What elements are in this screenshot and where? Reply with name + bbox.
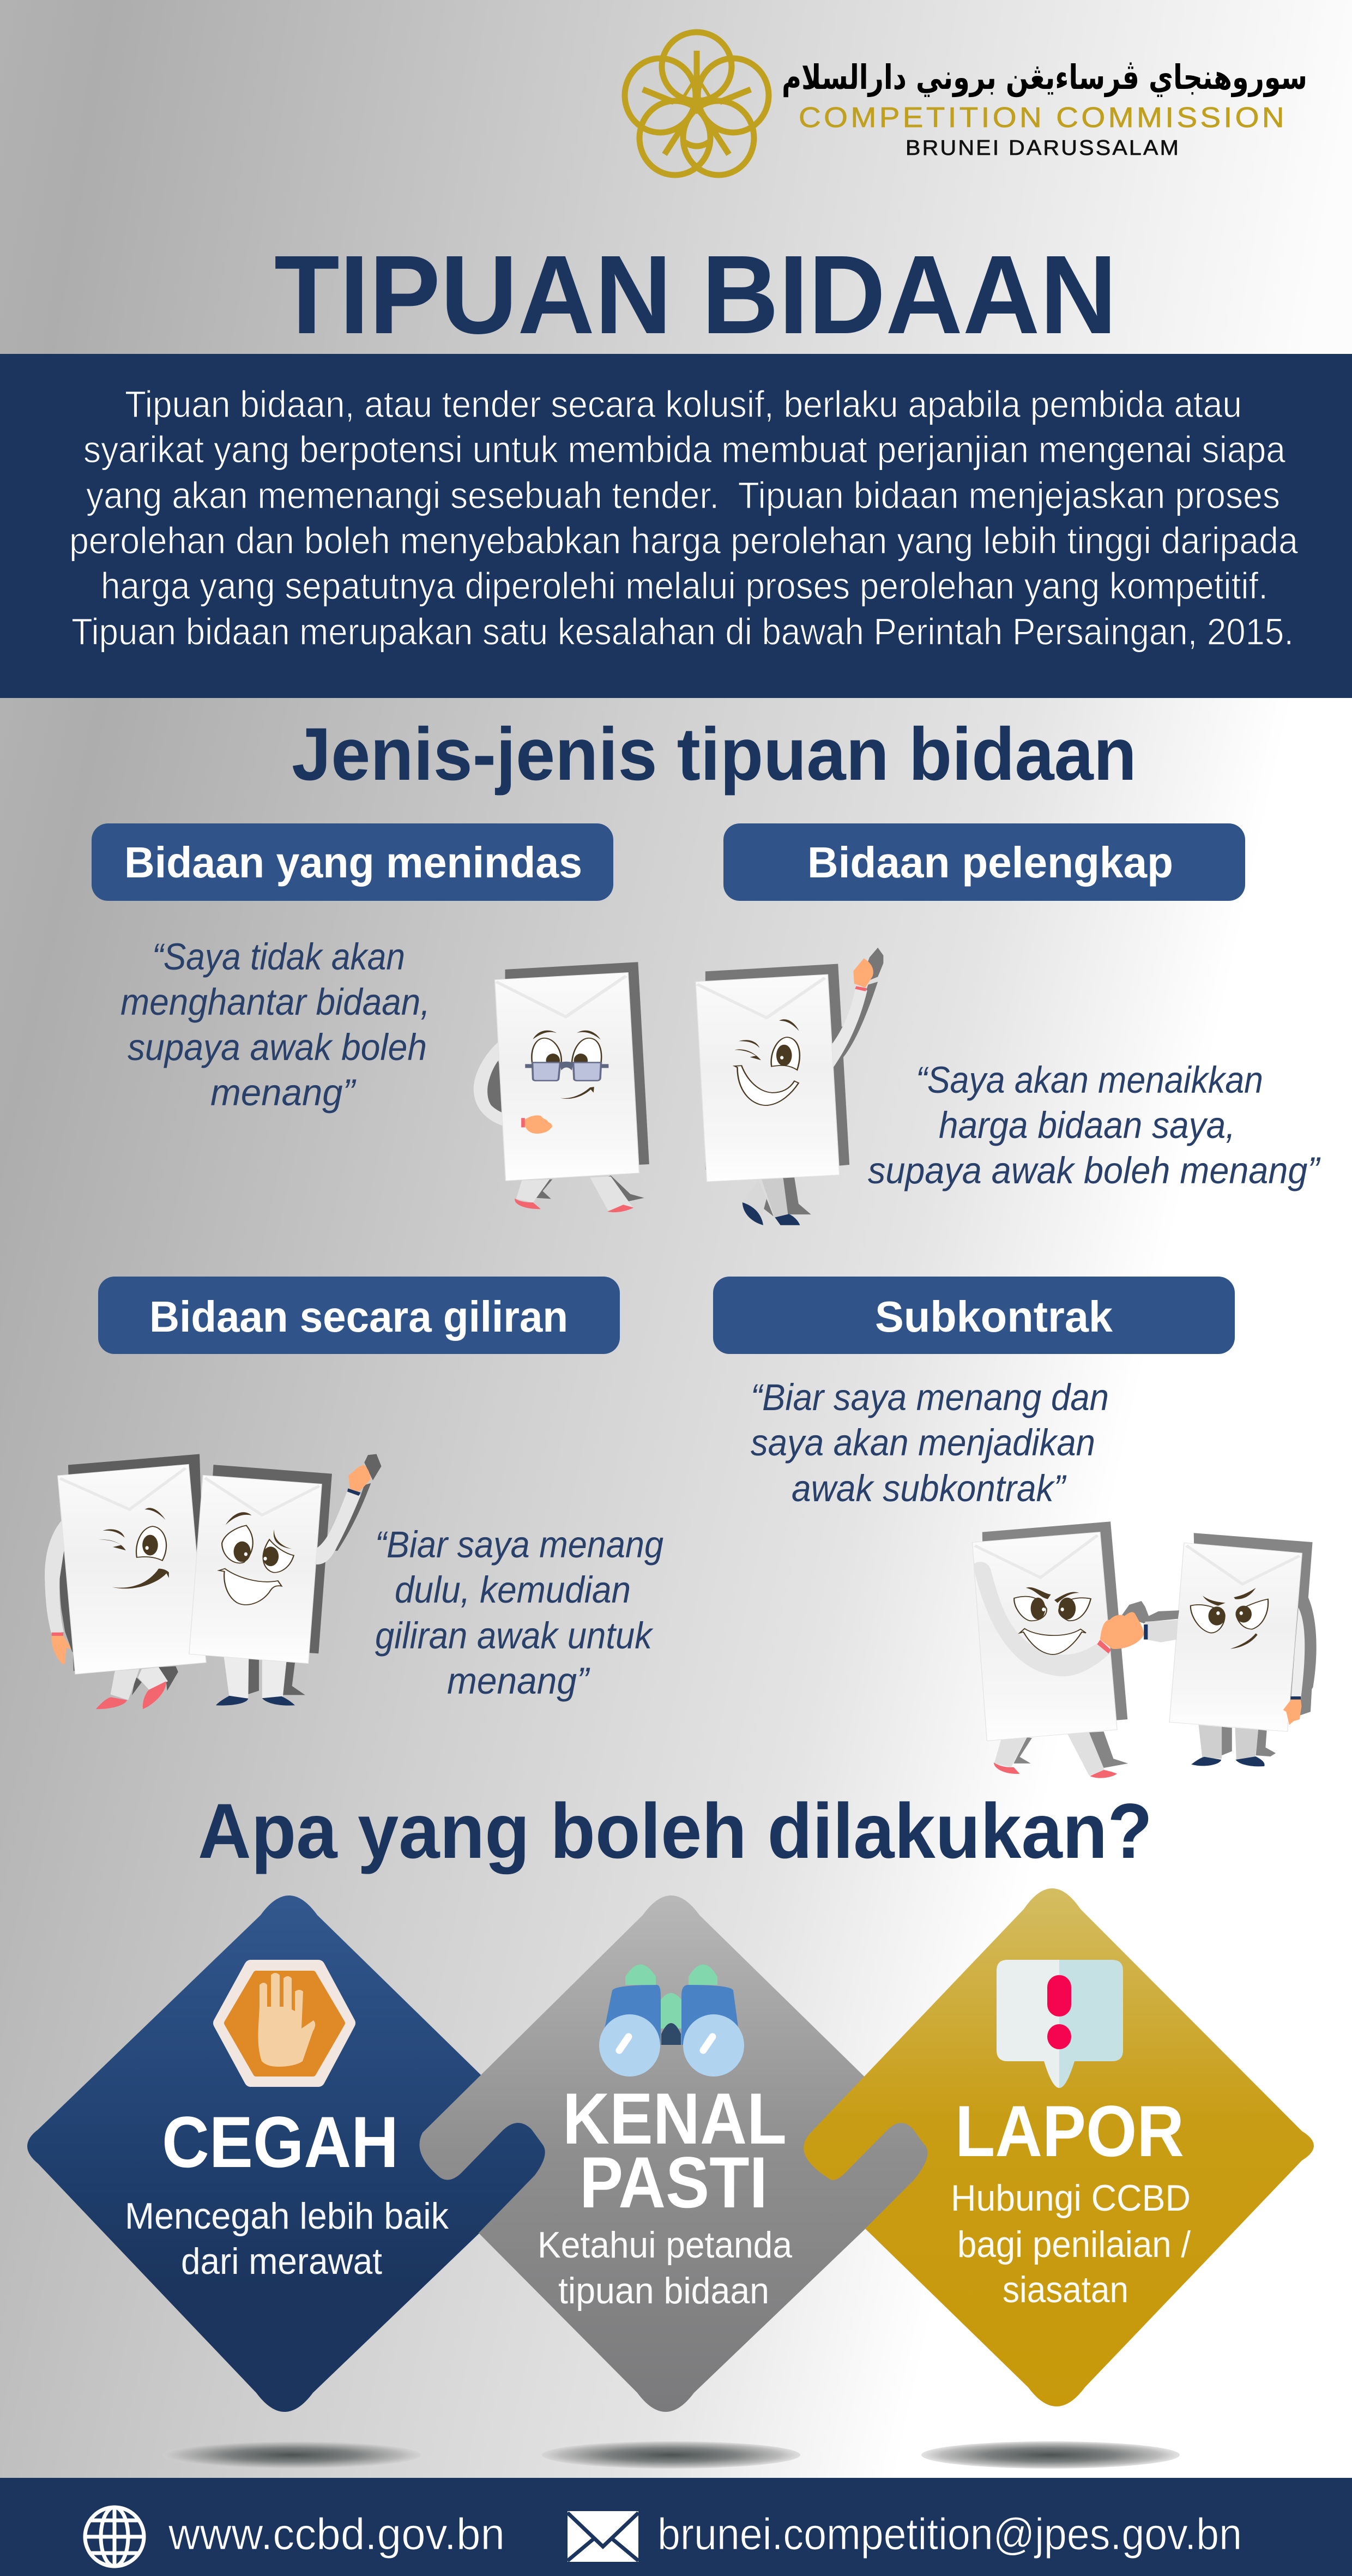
quote: complementary bid: harga bidaan saya, [939,1104,1235,1146]
icon: envelope [568,2511,638,2562]
icon: alert speech bubble [997,1960,1123,2088]
label pill: Bidaan yang menindas [92,823,613,901]
text: Lapor description: Hubungi CCBD [951,2177,1191,2219]
logo: Competition Commission Brunei Darussalam [625,32,1307,175]
text: Cegah description [125,2195,449,2282]
text: website: www.ccbd.gov.bn [168,2509,505,2559]
character: frowning envelope [1169,1533,1317,1766]
heading: KENAL PASTI: KENAL [563,2079,787,2159]
icon: stop hand sign [220,1966,349,2080]
characters: envelopes shaking hands for subcontract [972,1521,1317,1778]
label pill: Subkontrak: Subkontrak [875,1292,1113,1341]
character: grinning envelope waving [189,1454,382,1706]
text: Kenal Pasti description: tipuan bidaan [558,2270,769,2312]
icon: globe [85,2507,144,2566]
quote: cover bid suppression: menang” [210,1072,357,1114]
text: Lapor description [951,2177,1191,2310]
label pill: Bidaan secara giliran: Bidaan secara giliran [149,1292,568,1341]
text: Lapor description: bagi penilaian / [957,2224,1191,2265]
logo text: Brunei Darussalam: BRUNEI DARUSSALAM [906,136,1180,160]
footer band [0,2478,1352,2576]
icon: glasses [525,1062,608,1081]
quote: subcontract: “Biar saya menang dan [751,1376,1109,1418]
icon: gold rings emblem [625,32,769,175]
text block: definition of bid rigging: perolehan dan boleh menyebabkan harga perolehan yang lebih tinggi daripada [69,520,1299,562]
label pill: Bidaan yang menindas: Bidaan yang menindas [124,838,582,887]
quote: cover bid suppression [120,936,430,1114]
background: middle section [0,698,1352,2481]
text block: definition of bid rigging: syarikat yang berpotensi untuk membida membuat perjanjian mengenai siapa [83,429,1286,471]
heading: types of bid rigging: Jenis-jenis tipuan bidaan [292,713,1137,796]
text block: definition of bid rigging: Tipuan bidaan, atau tender secara kolusif, berlaku apabila pembida atau [125,383,1242,425]
quote: cover bid suppression: “Saya tidak akan [152,936,405,978]
panel: Kenal Pasti diamond [419,1895,938,2412]
label pill: Subkontrak [713,1277,1235,1354]
quote: complementary bid: supaya awak boleh menang” [868,1149,1321,1191]
quote: bid rotation: menang” [447,1660,590,1702]
characters: envelope with glasses and winking envelope [474,948,883,1225]
characters: two envelopes taking turns [45,1454,382,1709]
heading: CEGAH: CEGAH [162,2102,399,2183]
text block: definition of bid rigging: yang akan memenangi sesebuah tender. Tipuan bidaan menjejaskan proses [86,474,1280,516]
quote: bid rotation: dulu, kemudian [395,1569,631,1611]
label pill: Bidaan pelengkap [723,823,1245,901]
quote: subcontract: awak subkontrak” [792,1467,1067,1509]
quote: subcontract [751,1376,1109,1509]
quote: complementary bid: “Saya akan menaikkan [916,1059,1263,1101]
title: TIPUAN BIDAAN [274,232,1117,357]
text: email: brunei.competition@jpes.gov.bn [657,2509,1242,2559]
quote: complementary bid [868,1059,1321,1191]
heading: KENAL PASTI: PASTI [580,2142,768,2223]
text: Cegah description: Mencegah lebih baik [125,2195,449,2237]
panel: Cegah diamond [27,1895,556,2412]
text: Lapor description: siasatan [1003,2269,1128,2310]
text: Kenal Pasti description: Ketahui petanda [538,2224,792,2266]
text: Cegah description: dari merawat [181,2241,382,2282]
text block: definition of bid rigging [69,383,1299,653]
character: grinning envelope [972,1521,1128,1778]
quote: subcontract: saya akan menjadikan [751,1422,1095,1464]
icon: handshake between envelopes [1097,1601,1179,1653]
panel: introduction band [0,354,1352,698]
label pill: Bidaan pelengkap: Bidaan pelengkap [807,838,1173,887]
heading: KENAL PASTI [563,2079,787,2223]
character: winking envelope waving [696,948,883,1225]
background: top section [0,0,1352,354]
quote: bid rotation: “Biar saya menang [375,1524,663,1566]
diamond ground shadows [162,2441,1180,2469]
label pill: Bidaan secara giliran [98,1277,620,1354]
quote: cover bid suppression: supaya awak boleh [128,1026,427,1068]
quote: bid rotation: giliran awak untuk [375,1615,654,1657]
text block: definition of bid rigging: harga yang sepatutnya diperolehi melalui proses perolehan yang kompetitif. [101,565,1268,607]
heading: LAPOR: LAPOR [955,2091,1184,2172]
text: Kenal Pasti description [538,2224,792,2312]
logo text: Competition Commission: COMPETITION COMMISSION [799,102,1287,134]
panel: Lapor diamond [804,1888,1314,2406]
character: envelope with glasses [474,962,649,1212]
character: winking envelope [45,1454,206,1709]
icon: binoculars [599,1964,744,2077]
quote: cover bid suppression: menghantar bidaan, [120,981,430,1023]
quote: bid rotation [375,1524,663,1702]
heading: what can be done: Apa yang boleh dilakukan? [198,1788,1152,1875]
